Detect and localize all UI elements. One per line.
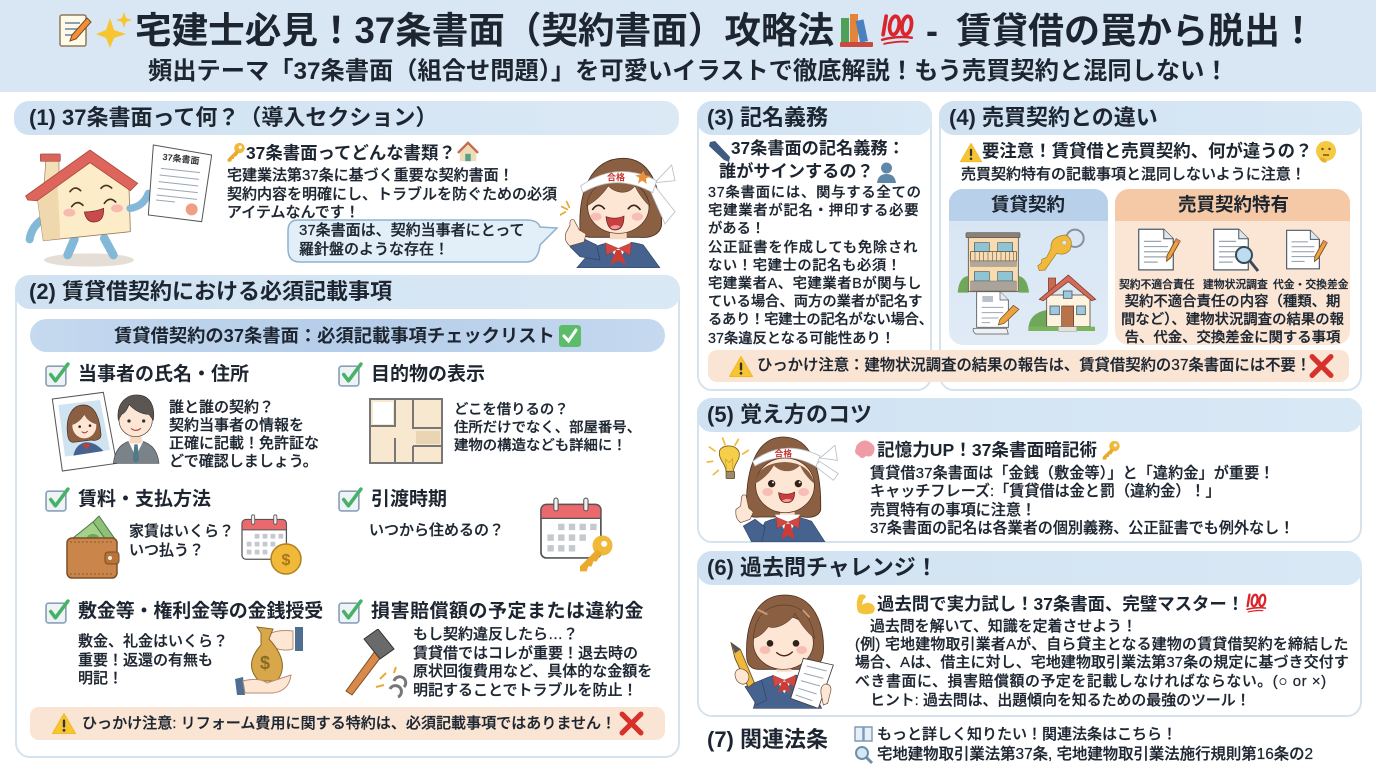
heading: section 1: (1) 37条書面って何？（導入セクション） xyxy=(29,105,437,130)
description: 賃貸借ではコレが重要！退去時の xyxy=(413,645,638,662)
icon: checkbox xyxy=(338,599,363,624)
body text: キャッチフレーズ:「賃貸借は金と罰（違約金）！」 xyxy=(870,483,1221,500)
heading: section 5: (5) 覚え方のコツ xyxy=(707,402,872,427)
heading: section 4: (4) 売買契約との違い xyxy=(949,105,1158,130)
icon: green check xyxy=(559,325,581,347)
checklist banner xyxy=(30,319,665,352)
exam question xyxy=(855,636,1349,691)
icon: open book xyxy=(854,725,873,742)
subhead: 売買契約特有の記載事項と混同しないように注意！ xyxy=(961,166,1306,183)
exam question: (例) 宅地建物取引業者Aが、自ら貸主となる建物の賃貸借契約を締結した xyxy=(855,637,1349,653)
illustration: girl with pencil and paper xyxy=(725,590,845,710)
icon: flexed arm xyxy=(854,593,876,615)
label: 引渡時期 xyxy=(371,489,447,510)
illustration: girl with idea: 合格 xyxy=(775,448,792,459)
title: 宅建士必見！37条書面（契約書面）攻略法 xyxy=(135,10,834,51)
text: intro lead: 37条書面ってどんな書類？ xyxy=(246,143,456,163)
lead text: 過去問で実力試し！37条書面、完璧マスター！ xyxy=(877,594,1244,614)
panel: (2) required items xyxy=(15,275,680,758)
item: deposits xyxy=(45,599,323,695)
body text xyxy=(708,184,933,348)
illustration: hammer and chain xyxy=(345,629,408,698)
label: 損害賠償額の予定または違約金 xyxy=(371,601,644,622)
label: inspection: 建物状況調査 xyxy=(1203,279,1268,291)
body text: ない！宅建士の記名も必須！ xyxy=(708,258,902,274)
label: 当事者の氏名・住所 xyxy=(78,364,249,385)
icon: person silhouette xyxy=(877,162,896,183)
lead text: 37条書面の記名義務： xyxy=(731,138,905,158)
description: いつ払う？ xyxy=(129,542,204,559)
panel: (1) introduction xyxy=(14,101,679,268)
icon: hundred points xyxy=(880,14,914,45)
description: 原状回復費用など、具体的な金額を xyxy=(413,663,652,680)
description: 契約当事者の情報を xyxy=(169,417,304,434)
hint: ヒント: 過去問は、出題傾向を知るための最強のツール！ xyxy=(870,693,1251,709)
column: sale contract only xyxy=(1115,189,1350,345)
heading: section 1 xyxy=(14,101,679,135)
icon: warning xyxy=(960,142,982,163)
illustration: money bag xyxy=(235,626,303,695)
lead text second line: 誰がサインするの？ xyxy=(719,161,874,181)
body text: ている場合、両方の業者が記名す xyxy=(708,294,922,310)
body text: 公正証書を作成しても免除され xyxy=(708,240,918,256)
description xyxy=(413,626,652,699)
description: 明記することでトラブルを防止！ xyxy=(413,682,638,699)
label: 目的物の表示 xyxy=(371,364,485,385)
icon: checkbox xyxy=(338,487,363,512)
speech bubble xyxy=(287,219,558,263)
description: 明記！ xyxy=(78,670,123,687)
description: 間など）、建物状況調査の結果の報 xyxy=(1121,312,1344,328)
text: intro body: アイテムなんです！ xyxy=(227,204,360,221)
label: nonconformity: 契約不適合責任 xyxy=(1119,279,1195,291)
body text: 37条違反となる可能性あり！ xyxy=(708,331,895,347)
column heading xyxy=(1115,189,1350,221)
description: 敷金、礼金はいくら？ xyxy=(78,633,228,650)
body text: 売買特有の事項に注意！ xyxy=(870,502,1036,519)
description xyxy=(78,633,228,687)
lead text: 要注意！賃貸借と売買契約、何が違うの？ xyxy=(982,141,1312,161)
text: bubble xyxy=(299,222,524,258)
description: 誰と誰の契約？ xyxy=(169,399,274,416)
icon: warning xyxy=(729,355,753,378)
warning text: ひっかけ注意：建物状況調査の結果の報告は、賃貸借契約の37条書面には不要！ xyxy=(757,357,1311,374)
body text: がある！ xyxy=(708,221,765,237)
column heading xyxy=(949,189,1108,221)
icon: memo xyxy=(59,14,92,47)
heading: section 2 xyxy=(15,275,680,309)
illustration: wallet xyxy=(66,515,120,579)
icon: checkbox xyxy=(45,599,70,624)
description xyxy=(1115,294,1350,347)
illustration: calendar and key xyxy=(540,498,612,572)
illustration: calendar and coin: $ xyxy=(282,552,291,569)
icon: checkbox xyxy=(45,362,70,387)
title suffix: - 賃貸借の罠から脱出！ xyxy=(926,10,1316,51)
text: intro body: 契約内容を明確にし、トラブルを防ぐための必須 xyxy=(227,186,557,202)
icon: house xyxy=(457,141,479,162)
icon: document price xyxy=(1285,227,1333,275)
exam question: べき書面に、損害賠償額の予定を記載しなければならない。(○ or ×) xyxy=(855,674,1327,690)
description: 契約不適合責任の内容（種類、期 xyxy=(1125,294,1340,310)
illustration: lease items xyxy=(945,220,1110,345)
illustration: house mascot with contract xyxy=(25,144,212,267)
lead text: 記憶力UP！37条書面暗記術 xyxy=(877,440,1097,460)
item: rent xyxy=(45,487,302,579)
label: 敷金等・権利金等の金銭授受 xyxy=(78,601,323,622)
text: bubble: 37条書面は、契約当事者にとって xyxy=(299,222,524,239)
illustration: girl pointing xyxy=(560,158,676,268)
body text: 過去問を解いて、知識を定着させよう！ xyxy=(870,619,1137,635)
item: damages xyxy=(338,599,652,699)
heading: section 4 xyxy=(939,101,1362,135)
link intro: もっと詳しく知りたい！関連法条はこちら！ xyxy=(877,726,1177,743)
body text: 37条書面には、関与する全ての xyxy=(708,185,922,201)
label: price: 代金・交換差金 xyxy=(1273,279,1349,291)
illustration: money bag: $ xyxy=(260,653,270,673)
checklist banner: 賃貸借契約の37条書面：必須記載事項チェックリスト xyxy=(114,325,555,346)
icon: checkbox xyxy=(45,487,70,512)
column heading: 売買契約特有 xyxy=(1178,194,1289,215)
icon: books xyxy=(840,14,873,47)
callout: trap warning xyxy=(30,707,665,740)
description: 重要！返還の有無も xyxy=(78,652,213,668)
heading: section 2: (2) 賃貸借契約における必須記載事項 xyxy=(29,279,392,304)
description: 建物の構造なども詳細に！ xyxy=(454,438,627,454)
panel: (4) difference from sale contract xyxy=(939,101,1362,391)
header banner xyxy=(0,0,1376,92)
description: 家賃はいくら？ xyxy=(129,523,234,540)
description: どで確認しましょう。 xyxy=(169,453,318,470)
illustration: calendar and coin xyxy=(241,514,302,575)
heading: section 6 xyxy=(697,551,1362,585)
icon: pen xyxy=(709,141,730,162)
body text: 37条書面の記名は各業者の個別義務、公正証書でも例外なし！ xyxy=(870,520,1294,537)
icon: key xyxy=(228,142,245,162)
body text: 宅建業者が記名・押印する必要 xyxy=(708,203,919,219)
exam question: 場合、Aは、借主に対し、宅地建物取引業法第37条の規定に基づき交付す xyxy=(855,655,1349,671)
illustration: house mascot with contract: 37条書面 xyxy=(162,151,200,166)
heading: section 3: (3) 記名義務 xyxy=(707,105,828,130)
icon: document nonconformity xyxy=(1137,227,1185,275)
icon: key xyxy=(1100,439,1121,461)
text: intro body: 宅建業法第37条に基づく重要な契約書面！ xyxy=(227,167,514,184)
column: lease contract xyxy=(949,189,1108,345)
panel: (6) past exam challenge xyxy=(697,551,1362,717)
description: いつから住めるの？ xyxy=(369,522,504,539)
icon: checkbox xyxy=(338,362,363,387)
icon: magnifier xyxy=(854,745,874,765)
heading: section 6: (6) 過去問チャレンジ！ xyxy=(707,555,938,580)
description: どこを借りるの？ xyxy=(454,402,569,418)
description: 正確に記載！免許証な xyxy=(169,435,319,452)
illustration: girl with idea xyxy=(700,432,845,542)
warning text: ひっかけ注意: リフォーム費用に関する特約は、必須記載事項ではありません！ xyxy=(82,715,616,732)
subtitle: 頻出テーマ「37条書面（組合せ問題）」を可愛いイラストで徹底解説！もう売買契約と混同しない！ xyxy=(148,58,1229,85)
item: property xyxy=(338,362,641,464)
body text: るあり！宅建士の記名がない場合、 xyxy=(708,312,933,328)
illustration: floor plan xyxy=(369,398,443,464)
body text: 賃貸借37条書面は「金銭（敷金等）」と「違約金」が重要！ xyxy=(870,465,1274,482)
icon: hundred points xyxy=(1245,592,1268,614)
law references: 宅地建物取引業法第37条, 宅地建物取引業法施行規則第16条の2 xyxy=(877,746,1313,763)
body text xyxy=(870,465,1294,539)
heading: section 3 xyxy=(697,101,932,135)
text: bubble: 羅針盤のような存在！ xyxy=(299,240,449,258)
icon: cross xyxy=(620,712,644,736)
icon: brain xyxy=(854,439,876,461)
item: handover xyxy=(338,487,612,572)
body text: 宅建業者A、宅建業者Bが関与し xyxy=(708,276,922,292)
callout: shared trap warning xyxy=(708,350,1349,382)
description xyxy=(129,523,234,559)
text: intro body xyxy=(227,167,557,221)
column heading: 賃貸契約 xyxy=(991,194,1065,215)
icon: document inspection xyxy=(1212,227,1260,275)
illustration: photo and man xyxy=(52,392,160,472)
icon: cross xyxy=(1309,353,1334,379)
description: 住所だけでなく、部屋番号、 xyxy=(454,420,641,436)
section (7) related law xyxy=(697,722,1362,766)
description xyxy=(454,402,641,454)
illustration: girl pointing: 合格 xyxy=(607,172,625,183)
panel: (5) memorization tips xyxy=(697,398,1362,543)
icon: thinking face xyxy=(1315,140,1337,164)
heading: section 5 xyxy=(697,398,1362,432)
icon: warning xyxy=(52,713,76,734)
icon: sparkles xyxy=(96,12,132,48)
description xyxy=(169,399,319,470)
label: 賃料・支払方法 xyxy=(78,489,211,510)
description: もし契約違反したら…？ xyxy=(413,626,578,643)
heading: section 7: (7) 関連法条 xyxy=(707,727,828,752)
panel: (3) signature duty xyxy=(697,101,932,391)
item: parties xyxy=(45,362,319,472)
